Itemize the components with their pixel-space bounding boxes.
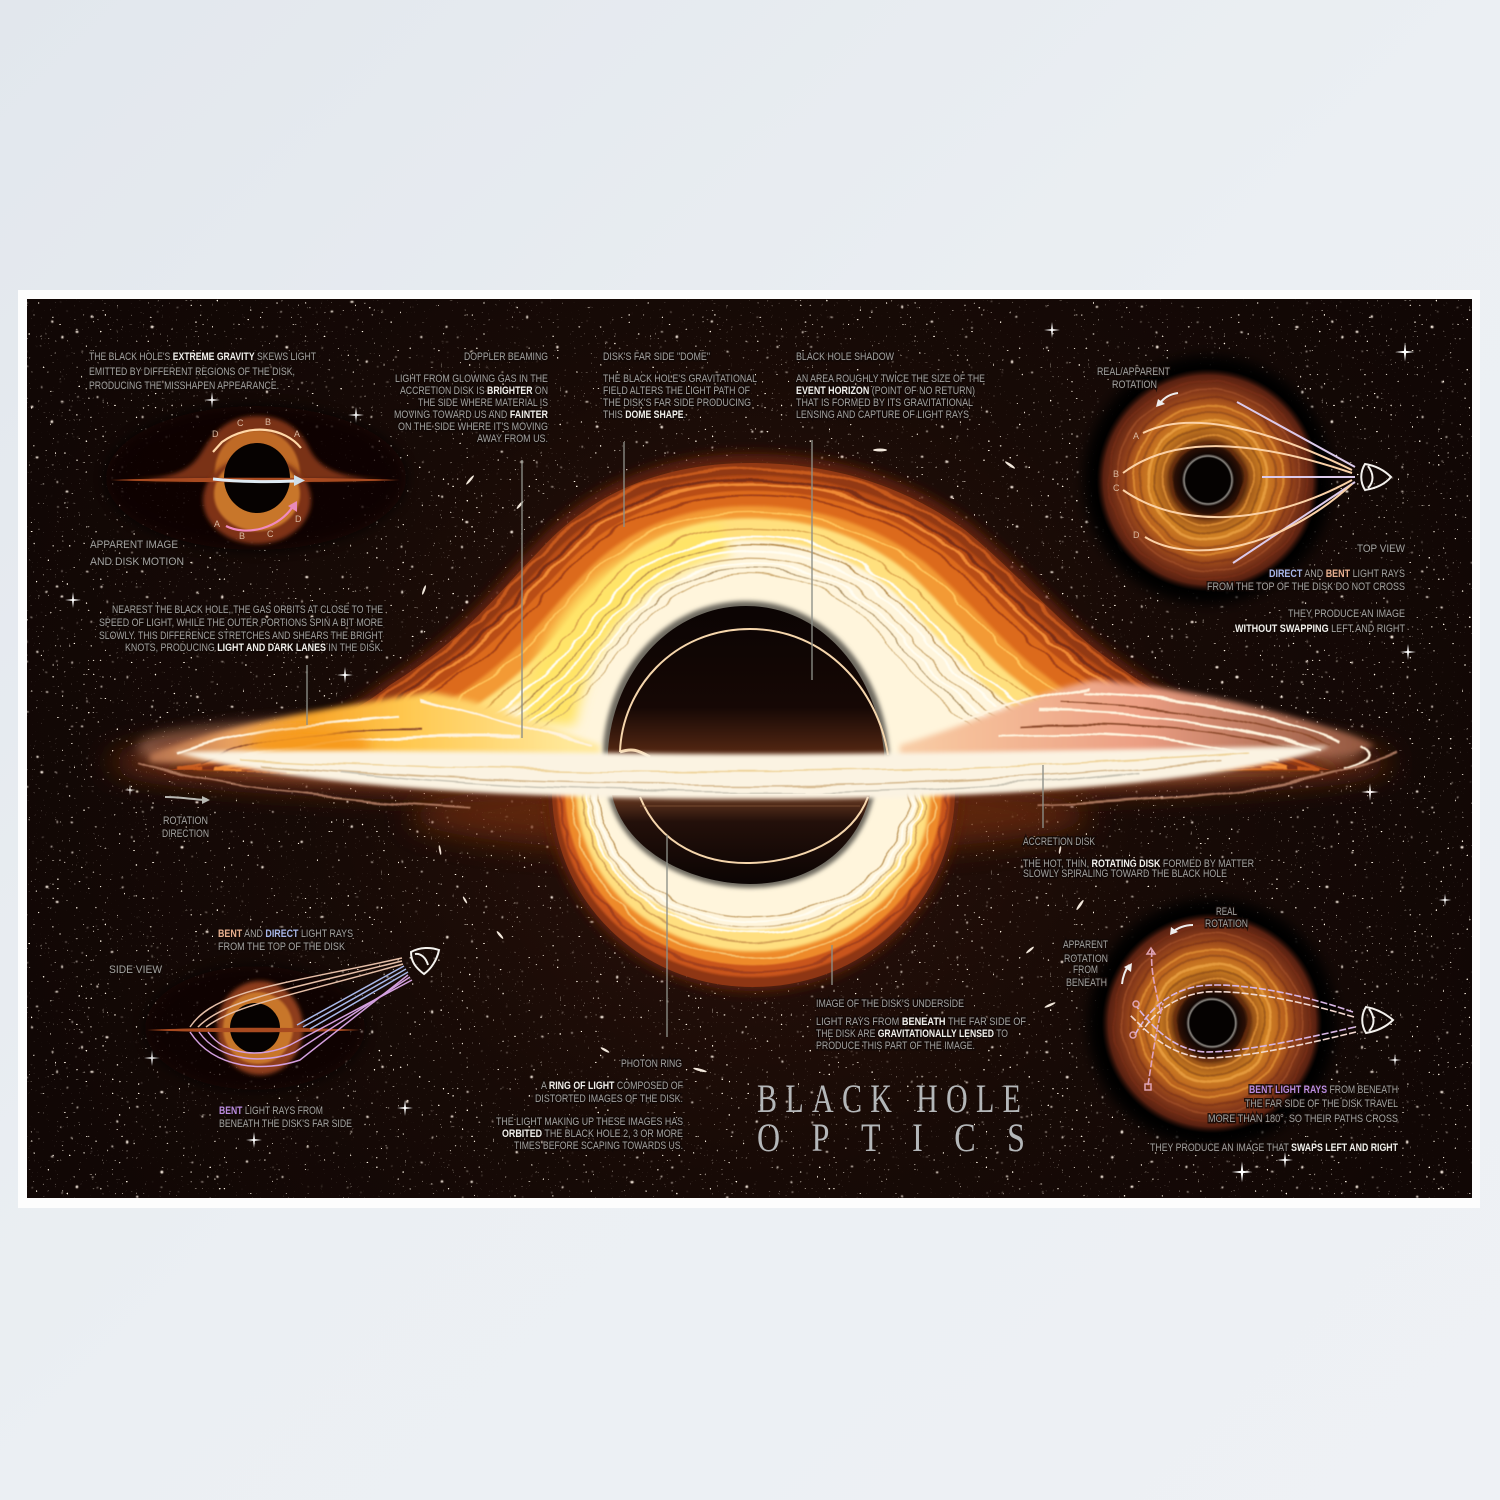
text: black hole shadow: EVENT HORIZON (POINT OF NO RETURN): [796, 385, 975, 397]
bent rays: [1123, 423, 1352, 550]
main black hole illustration: [110, 454, 1395, 991]
text: underside image: THE DISK ARE GRAVITATIONALLY LENSED TO: [816, 1028, 1008, 1040]
near side bright band: [175, 746, 1330, 799]
small letters: B: [265, 417, 271, 427]
text: photon ring: A RING OF LIGHT COMPOSED OF: [541, 1080, 683, 1092]
text: extreme gravity: [89, 351, 316, 392]
text: accretion disk: SLOWLY SPIRALING TOWARD THE BLACK HOLE: [1023, 868, 1227, 880]
text: side view labels: [109, 928, 353, 1130]
side shadow: [230, 1003, 280, 1053]
leader lines: [307, 440, 1043, 1037]
text: apparent image: APPARENT IMAGE: [90, 539, 178, 551]
text: light and dark lanes: SLOWLY. THIS DIFFERENCE STRETCHES AND SHEARS THE BRIGHT: [99, 630, 383, 642]
text: side view labels: FROM THE TOP OF THE DISK: [218, 941, 346, 953]
text: bottom view labels: REAL: [1216, 906, 1237, 918]
photon ring: [620, 629, 888, 863]
text: black hole shadow: AN AREA ROUGHLY TWICE THE SIZE OF THE: [796, 373, 985, 385]
text: bottom view labels: MORE THAN 180°, SO THEIR PATHS CROSS: [1208, 1113, 1398, 1125]
top view letters: C: [1113, 483, 1120, 493]
side eye: [411, 948, 439, 974]
text: side view labels: BENEATH THE DISK'S FAR SIDE: [219, 1118, 352, 1130]
underside image of disk: [548, 790, 959, 991]
lensed star streaks: [421, 448, 1124, 1073]
far side of accretion disk: [150, 680, 1375, 762]
small letters: D: [212, 429, 219, 439]
text: top view labels: [1097, 366, 1406, 635]
text: doppler beaming: DOPPLER BEAMING: [464, 351, 548, 363]
rotation arrow: [1156, 393, 1178, 407]
text: underside image: LIGHT RAYS FROM BENEATH THE FAR SIDE OF: [816, 1016, 1026, 1028]
text: underside image: IMAGE OF THE DISK'S UNDERSIDE: [816, 998, 964, 1010]
real rotation arrow: [1170, 925, 1193, 935]
text: photon ring: PHOTON RING: [621, 1058, 682, 1070]
far side streaks: [175, 688, 1368, 768]
text: side view labels: BENT AND DIRECT LIGHT RAYS: [218, 928, 353, 940]
apparent rotation arrow: [1122, 963, 1132, 984]
disk near side lower edge: [140, 752, 1395, 808]
text: top view labels: WITHOUT SWAPPING LEFT AND RIGHT: [1235, 623, 1405, 635]
peach arrow: [213, 430, 301, 452]
text: accretion disk: ACCRETION DISK: [1023, 836, 1096, 848]
text: light and dark lanes: NEAREST THE BLACK HOLE, THE GAS ORBITS AT CLOSE TO THE: [112, 604, 383, 616]
glow behind disk: [110, 728, 1390, 853]
small letters: A: [214, 519, 220, 529]
text: bottom view labels: THEY PRODUCE AN IMAGE THAT SWAPS LEFT AND RIGHT: [1150, 1142, 1398, 1154]
dome light lanes: [179, 468, 1321, 770]
small letters: B: [239, 531, 245, 541]
dome: far side of disk: [158, 454, 1342, 770]
side disk band: [147, 1028, 360, 1032]
text: top view labels: THEY PRODUCE AN IMAGE: [1288, 608, 1405, 620]
text: bottom view labels: BENEATH: [1066, 977, 1107, 989]
eye: [1361, 464, 1391, 490]
text: photon ring: DISTORTED IMAGES OF THE DISK.: [535, 1093, 683, 1105]
text: light and dark lanes: KNOTS, PRODUCING LIGHT AND DARK LANES IN THE DISK.: [125, 642, 383, 654]
diagram: apparent image and disk motion: [106, 406, 406, 550]
poster panel: [27, 299, 1472, 1198]
text: doppler beaming: AWAY FROM US.: [477, 433, 548, 445]
small letters: C: [267, 529, 274, 539]
text: rotation direction: ROTATION: [163, 815, 208, 827]
small letters: A: [294, 429, 300, 439]
black hole shadow: [602, 601, 890, 888]
text: bottom view labels: FROM: [1073, 964, 1098, 976]
text: underside image: PRODUCE THIS PART OF THE IMAGE.: [816, 1040, 975, 1052]
text: doppler beaming: LIGHT FROM GLOWING GAS IN THE: [395, 373, 548, 385]
text: apparent image: AND DISK MOTION: [90, 556, 184, 568]
text: black hole shadow: [796, 351, 985, 421]
yellow hot region on the approaching side: [520, 522, 730, 725]
starfield: [27, 299, 1472, 1198]
ray end markers: [1130, 948, 1155, 1090]
text: far side dome: THE BLACK HOLE'S GRAVITATIONAL: [603, 373, 757, 385]
text: bottom view labels: BENT LIGHT RAYS FROM BENEATH: [1249, 1084, 1398, 1096]
text: top view labels: TOP VIEW: [1357, 543, 1406, 555]
text: extreme gravity: THE BLACK HOLE'S EXTREME GRAVITY SKEWS LIGHT: [89, 351, 316, 363]
diagram: top view: [1084, 356, 1391, 604]
text: top view labels: FROM THE TOP OF THE DISK DO NOT CROSS: [1207, 581, 1405, 593]
peach rays: [190, 958, 403, 1027]
band streaks: [240, 752, 1250, 792]
text: black hole shadow: BLACK HOLE SHADOW: [796, 351, 894, 363]
text: photon ring: ORBITED THE BLACK HOLE 2, 3 OR MORE: [502, 1128, 683, 1140]
purple rays: [190, 975, 412, 1067]
direct rays: [1233, 402, 1355, 563]
text: top view labels: DIRECT AND BENT LIGHT RAYS: [1269, 568, 1405, 580]
text: accretion disk: [1023, 836, 1254, 880]
top view letters: A: [1133, 431, 1139, 441]
text: black hole shadow: THAT IS FORMED BY ITS GRAVITATIONAL: [796, 397, 973, 409]
dashed bent rays: [1130, 950, 1356, 1085]
text: bottom view labels: THE FAR SIDE OF THE DISK TRAVEL: [1245, 1098, 1398, 1110]
small disk band: [110, 478, 400, 482]
small letters: D: [295, 514, 302, 524]
text: bottom view labels: [1063, 906, 1398, 1154]
diagram: side view: [145, 948, 439, 1090]
text: bottom view labels: ROTATION: [1205, 918, 1248, 930]
small letters: C: [237, 418, 244, 428]
text: rotation direction: DIRECTION: [162, 828, 209, 840]
text: doppler beaming: [394, 351, 548, 445]
text: far side dome: THE DISK'S FAR SIDE PRODUCING: [603, 397, 751, 409]
rotation direction arrow: [165, 796, 210, 804]
blue rays: [297, 966, 408, 1029]
text: side view labels: SIDE VIEW: [109, 964, 163, 976]
text: far side dome: [603, 351, 757, 421]
small letters: [212, 417, 302, 541]
text: underside image: [816, 998, 1026, 1052]
outer disk ring: [142, 710, 1358, 786]
white arrow: [213, 479, 295, 482]
text: doppler beaming: ON THE SIDE WHERE IT'S MOVING: [398, 421, 548, 433]
top view letters: D: [1133, 530, 1140, 540]
text: apparent image: [90, 539, 184, 568]
text: bottom view labels: ROTATION: [1064, 953, 1108, 965]
title: BLACK HOLE: [757, 1076, 1021, 1121]
text: rotation direction: [162, 815, 209, 840]
small shadow: [224, 443, 290, 513]
hot spot at left side: [250, 728, 370, 762]
text: bottom view labels: APPARENT: [1063, 939, 1108, 951]
text: light and dark lanes: [99, 604, 383, 654]
eye: [1362, 1007, 1393, 1033]
small disk dome: [125, 416, 390, 480]
text: accretion disk: THE HOT, THIN, ROTATING DISK FORMED BY MATTER: [1023, 858, 1254, 870]
text: far side dome: THIS DOME SHAPE.: [603, 409, 686, 421]
text: far side dome: FIELD ALTERS THE LIGHT PATH OF: [603, 385, 750, 397]
poster white frame: [18, 290, 1480, 1208]
accretion disk: [140, 680, 1395, 808]
text: doppler beaming: ACCRETION DISK IS BRIGHTER ON: [400, 385, 548, 397]
pink arrow: [226, 503, 295, 531]
top view letters: [1113, 431, 1140, 540]
text: top view labels: ROTATION: [1112, 379, 1157, 391]
title: OPTICS: [757, 1116, 1025, 1160]
text: photon ring: TIMES BEFORE SCAPING TOWARDS US.: [514, 1140, 683, 1152]
text: doppler beaming: THE SIDE WHERE MATERIAL IS: [418, 397, 548, 409]
side disk rings: [217, 981, 303, 1075]
text: doppler beaming: MOVING TOWARD US AND FAINTER: [394, 409, 548, 421]
text: extreme gravity: EMITTED BY DIFFERENT REGIONS OF THE DISK,: [89, 366, 295, 378]
title: [757, 1076, 1025, 1160]
text: black hole shadow: LENSING AND CAPTURE OF LIGHT RAYS: [796, 409, 969, 421]
top view letters: B: [1113, 469, 1119, 479]
text: extreme gravity: PRODUCING THE MISSHAPEN APPEARANCE.: [89, 380, 279, 392]
text: photon ring: THE LIGHT MAKING UP THESE IMAGES HAS: [496, 1116, 683, 1128]
small disk underside: [203, 456, 311, 544]
diagram: bottom view: [1088, 899, 1393, 1147]
text: light and dark lanes: SPEED OF LIGHT, WHILE THE OUTER PORTIONS SPIN A BIT MORE: [99, 617, 383, 629]
annotations: [89, 351, 1406, 1154]
text: side view labels: BENT LIGHT RAYS FROM: [219, 1105, 323, 1117]
text: photon ring: [496, 1058, 683, 1152]
bright stars: [65, 322, 1451, 1182]
text: top view labels: REAL/APPARENT: [1097, 366, 1170, 378]
text: far side dome: DISK'S FAR SIDE "DOME": [603, 351, 710, 363]
